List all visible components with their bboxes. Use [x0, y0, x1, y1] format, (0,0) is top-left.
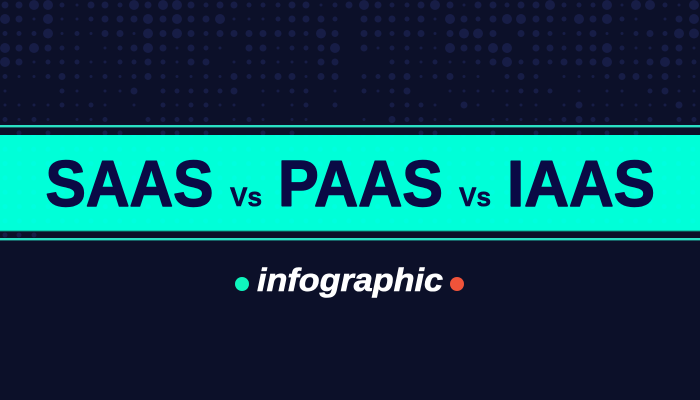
halftone dot pattern: [5, 5, 694, 235]
heading: IAAS: IAAS: [507, 147, 655, 220]
label: second Vs: Vs: [459, 182, 491, 212]
heading: SAAS: SAAS: [46, 147, 214, 220]
bottom accent line: [0, 238, 700, 240]
top accent line: [0, 125, 700, 127]
icon: green dot: [235, 277, 249, 291]
icon: red dot: [450, 277, 464, 291]
title banner: [0, 135, 700, 231]
subtitle: infographic: infographic: [257, 262, 443, 298]
label: Vs: Vs: [230, 182, 262, 212]
heading: PAAS: PAAS: [278, 147, 443, 220]
